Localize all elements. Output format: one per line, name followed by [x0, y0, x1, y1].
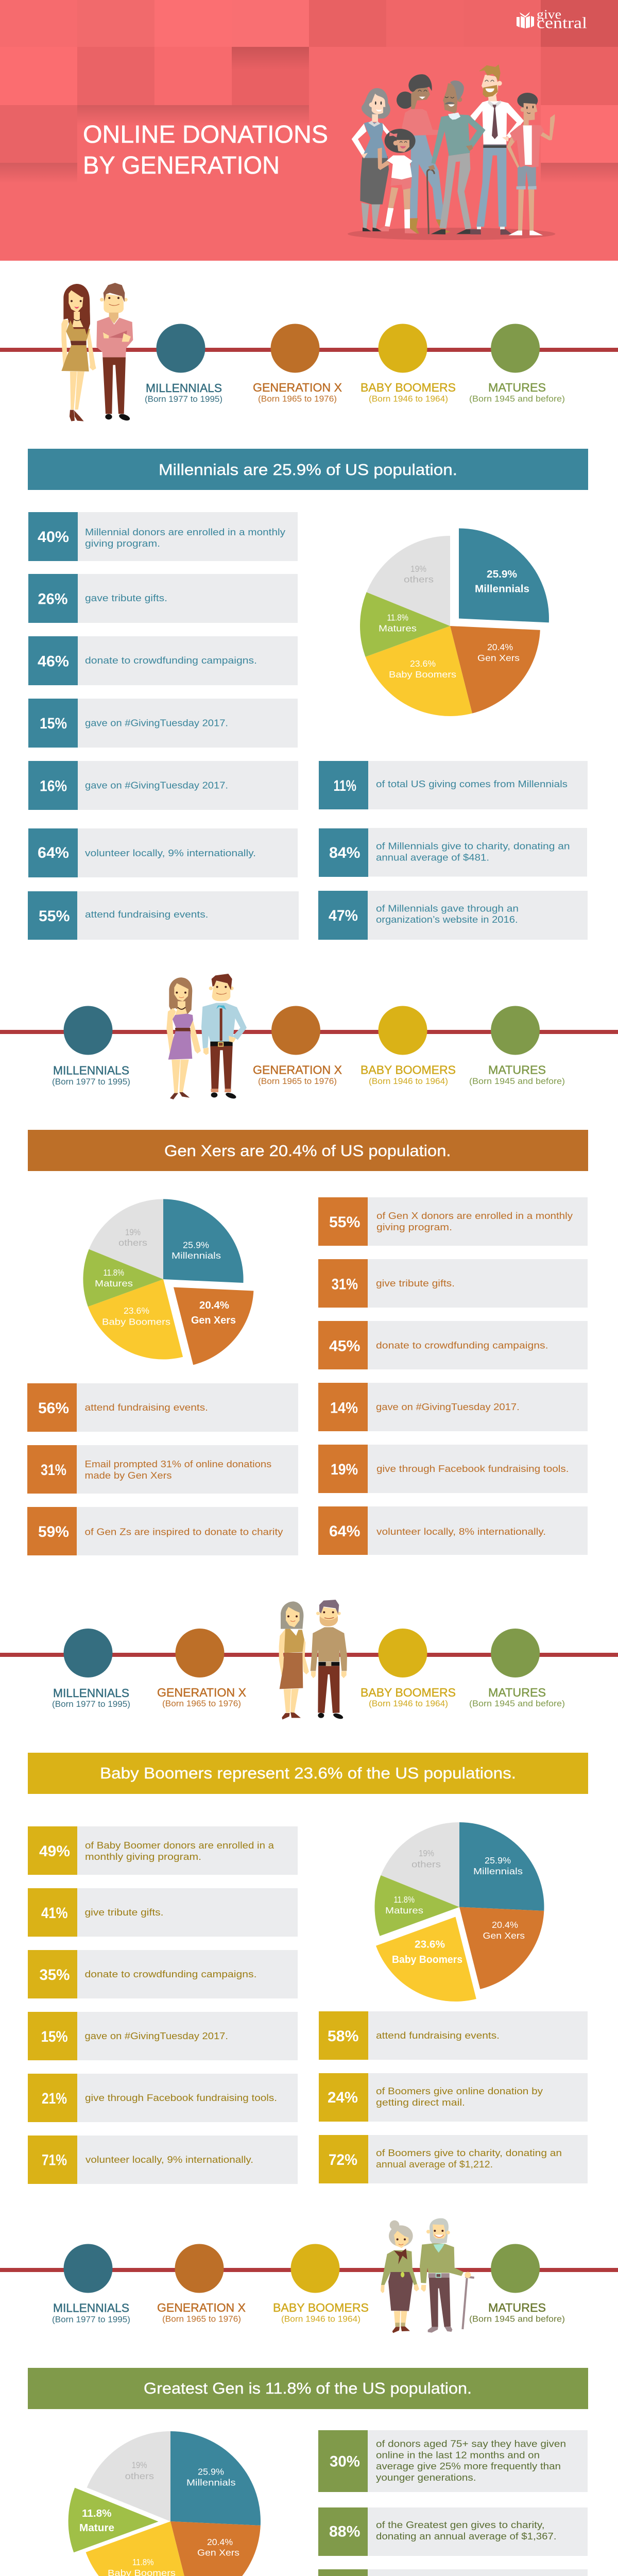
stat: 30% donors aged 75+: 30% — [330, 2453, 360, 2470]
stat: 21% facebook tools — [28, 2074, 298, 2122]
pie chart: baby boomers exploded: Millennials — [473, 1866, 523, 1876]
figure: standing woman behind — [397, 74, 451, 233]
pie chart: matures exploded: Mature — [79, 2522, 114, 2534]
pie chart: millennials exploded: 25.9% — [487, 569, 517, 580]
generation labels: (Born 1977 to 1995) — [145, 395, 222, 404]
stat: 46% crowdfunding: 46% — [38, 653, 69, 670]
stat: 56% fundraising events: attend fundraising events. — [84, 1402, 208, 1413]
stat: 64% volunteer — [28, 828, 298, 877]
stat: 59% gen zs inspired: of Gen Zs are inspired to donate to charity — [84, 1527, 283, 1537]
generation labels: (Born 1945 and before) — [469, 2315, 565, 2324]
stat: 45% crowdfunding — [318, 1321, 588, 1369]
stat: 41% tribute gifts — [28, 1888, 298, 1937]
generation labels — [145, 381, 565, 404]
timeline 2: gen x highlighted — [0, 974, 618, 1100]
stat: 40% monthly giving: Millennial donors are enrolled in a monthly — [85, 527, 285, 537]
generation labels: BABY BOOMERS — [360, 381, 456, 394]
pie chart: matures exploded: 19% — [132, 2460, 147, 2470]
stat: 24% direct mail: 24% — [328, 2089, 358, 2106]
heading banner: gen xers — [28, 1130, 588, 1171]
stat: 30% donors aged 75+: online in the last 12 months and on — [376, 2450, 540, 2461]
title: ONLINE DONATIONS — [83, 121, 328, 148]
pie chart: baby boomers exploded: 25.9% — [485, 1855, 511, 1866]
title — [83, 121, 328, 179]
pie chart: gen xers exploded: Millennials — [171, 1250, 221, 1261]
heading banner: baby boomers — [28, 1753, 588, 1794]
stat: 46% crowdfunding — [28, 636, 298, 685]
generation labels: (Born 1965 to 1976) — [258, 395, 337, 404]
generation labels — [52, 2301, 565, 2325]
stat: 24% direct mail: getting direct mail. — [376, 2097, 465, 2108]
pie chart: matures exploded: 11.8% — [132, 2557, 153, 2567]
stat: 11% of total giving: of total US giving comes from Millennials — [376, 779, 568, 789]
stat: 15% giving tuesday: gave on #GivingTuesday 2017. — [84, 2031, 228, 2041]
timeline 1: millennials highlighted — [0, 283, 618, 422]
generation labels: (Born 1977 to 1995) — [52, 1700, 130, 1709]
stat: 47% website giving: organization’s website in 2016. — [376, 914, 518, 925]
generation labels: GENERATION X — [157, 2301, 246, 2314]
stat: 58% fundraising events: attend fundraising events. — [376, 2030, 500, 2041]
heading banner: greatest gen: Greatest Gen is 11.8% of the US population. — [144, 2379, 472, 2397]
generation labels: (Born 1965 to 1976) — [258, 1077, 337, 1086]
stat: 55% fundraising events: attend fundraising events. — [85, 909, 208, 920]
stat: 16% giving tuesday: gave on #GivingTuesday 2017. — [85, 781, 228, 791]
stat: 72% give to charity: annual average of $1,212. — [376, 2159, 493, 2170]
stat: 64% volunteer: 64% — [329, 1523, 360, 1540]
stat: 64% volunteer: volunteer locally, 9% internationally. — [85, 848, 256, 858]
stat: 55% monthly giving: of Gen X donors are enrolled in a monthly — [376, 1211, 573, 1221]
stat: 30% donors aged 75+: younger generations. — [376, 2472, 476, 2483]
pie chart: gen xers exploded: Gen Xers — [191, 1315, 236, 1326]
generation labels: (Born 1945 and before) — [469, 1699, 565, 1708]
generation labels: (Born 1946 to 1964) — [369, 395, 448, 404]
stat: 56% fundraising events: 56% — [38, 1400, 69, 1417]
pie chart: baby boomers exploded: Gen Xers — [483, 1930, 525, 1941]
logo: give central — [517, 8, 587, 32]
stat: 88% give to charity: donating an annual average of $1,367. — [376, 2531, 557, 2541]
stat: 14% giving tuesday — [318, 1383, 588, 1431]
stat: 88% give to charity: 88% — [329, 2523, 360, 2540]
generation labels: MATURES — [488, 1063, 546, 1077]
stat: 49% monthly giving: 49% — [39, 1843, 70, 1860]
section: gen xers — [27, 1130, 588, 1555]
stat: 15% giving tuesday — [28, 2012, 298, 2060]
stat: 55% monthly giving: giving program. — [376, 1222, 452, 1232]
stat: 21% facebook tools: give through Facebook fundraising tools. — [85, 2093, 277, 2103]
pie chart: baby boomers exploded: 11.8% — [393, 1894, 415, 1905]
pie chart: gen xers exploded: 11.8% — [103, 1267, 124, 1278]
stat: 14% giving tuesday: 14% — [330, 1399, 358, 1416]
heading banner: baby boomers: Baby Boomers represent 23.6% of the US populations. — [100, 1764, 516, 1782]
pie chart: millennials exploded: 23.6% — [410, 658, 436, 669]
stat: 15% giving tuesday: 15% — [40, 715, 67, 732]
pie chart: baby boomers exploded: 23.6% — [415, 1939, 445, 1951]
pie chart: gen xers exploded: 25.9% — [183, 1240, 209, 1250]
generation labels — [52, 1686, 565, 1709]
stat: 30% donors aged 75+ — [318, 2430, 588, 2492]
stat: 47% website giving: of Millennials gave through an — [376, 903, 519, 913]
heading banner: millennials: Millennials are 25.9% of US population. — [159, 461, 457, 479]
stat: 72% give to charity: 72% — [329, 2151, 357, 2168]
generation labels: (Born 1946 to 1964) — [369, 1077, 448, 1086]
stat: 19% facebook tools: give through Facebook fundraising tools. — [376, 1464, 569, 1474]
stat: 40% monthly giving: 40% — [38, 529, 69, 546]
stat: 55% fundraising events — [28, 891, 299, 940]
pie chart: millennials exploded: Baby Boomers — [389, 669, 456, 680]
logo: give central: give — [537, 8, 561, 22]
stat: 31% email prompted — [27, 1445, 298, 1494]
generation labels: (Born 1946 to 1964) — [369, 1699, 448, 1708]
stat: 64% volunteer: 64% — [38, 844, 69, 861]
figure: older man with cane — [427, 80, 486, 234]
timeline 3: baby boomers highlighted — [0, 1600, 618, 1720]
stat: 41% tribute gifts: give tribute gifts. — [84, 1907, 164, 1918]
stat: 47% website giving — [318, 891, 588, 940]
figure: tall bearded man — [470, 64, 524, 235]
stat: 31% email prompted: Email prompted 31% of online donations — [84, 1459, 271, 1469]
pie chart: baby boomers exploded: 20.4% — [492, 1920, 518, 1930]
illustration: millennial couple — [61, 283, 133, 422]
pie chart: gen xers exploded: 20.4% — [199, 1300, 229, 1311]
pie chart: baby boomers exploded: others — [411, 1859, 441, 1869]
pie chart: gen xers exploded: Matures — [95, 1278, 133, 1289]
stat: 35% crowdfunding: donate to crowdfunding campaigns. — [84, 1969, 256, 1979]
stat: 26% total giving — [318, 2569, 588, 2576]
pie chart: baby boomers exploded: Matures — [385, 1905, 423, 1916]
generation labels: (Born 1965 to 1976) — [162, 1699, 241, 1708]
stat: 11% of total giving — [319, 761, 588, 809]
pie chart: baby boomers exploded: Baby Boomers — [392, 1954, 462, 1965]
pie chart: baby boomers exploded: 19% — [419, 1848, 434, 1858]
generation labels — [52, 1063, 565, 1087]
stat: 55% monthly giving: 55% — [329, 1214, 360, 1231]
stat: 72% give to charity — [319, 2135, 588, 2183]
generation labels: (Born 1946 to 1964) — [281, 2315, 360, 2324]
stat: 64% volunteer — [318, 1506, 588, 1555]
stat: 71% volunteer: 71% — [42, 2152, 67, 2169]
figure: grandmother — [352, 88, 390, 231]
pie chart: millennials exploded: 11.8% — [387, 613, 408, 623]
stat: 84% give to charity: of Millennials give to charity, donating an — [376, 841, 570, 851]
section: millennials — [28, 449, 588, 940]
pie chart: matures exploded: 11.8% — [82, 2508, 112, 2519]
stat: 31% email prompted: made by Gen Xers — [84, 1470, 172, 1481]
stat: 58% fundraising events: 58% — [328, 2028, 358, 2045]
stat: 40% monthly giving — [28, 512, 298, 561]
stat: 26% tribute gifts: 26% — [38, 590, 68, 607]
stat: 59% gen zs inspired — [27, 1507, 298, 1555]
stat: 16% giving tuesday — [28, 761, 298, 810]
section: baby boomers — [28, 1753, 588, 2184]
stat: 64% volunteer: volunteer locally, 8% internationally. — [376, 1527, 546, 1537]
pie chart: millennials exploded: 20.4% — [487, 642, 513, 652]
generation labels: GENERATION X — [253, 381, 342, 394]
stat: 19% facebook tools — [318, 1445, 588, 1493]
generation labels: MILLENNIALS — [53, 2301, 129, 2315]
stat: 15% giving tuesday: 15% — [41, 2028, 68, 2045]
stat: 49% monthly giving: monthly giving program. — [85, 1852, 201, 1862]
stat: 31% tribute gifts: give tribute gifts. — [376, 1278, 455, 1289]
stat: 26% tribute gifts: gave tribute gifts. — [85, 593, 167, 603]
stat: 31% tribute gifts — [318, 1259, 588, 1308]
stat: 24% direct mail: of Boomers give online donation by — [376, 2086, 543, 2096]
stat: 46% crowdfunding: donate to crowdfunding campaigns. — [85, 655, 257, 666]
stat: 84% give to charity — [319, 828, 587, 877]
stat: 11% of total giving: 11% — [334, 777, 356, 794]
pie chart: gen xers exploded: others — [118, 1238, 147, 1248]
stat: 35% crowdfunding — [28, 1950, 298, 1998]
stat: 16% giving tuesday: 16% — [40, 778, 67, 795]
pie chart: baby boomers exploded — [374, 1822, 544, 2002]
pie chart: matures exploded: 25.9% — [198, 2467, 224, 2477]
stat: 55% monthly giving — [318, 1197, 588, 1246]
pie chart: matures exploded — [68, 2431, 261, 2576]
stat: 71% volunteer — [28, 2136, 298, 2184]
generation labels: (Born 1945 and before) — [469, 1077, 565, 1086]
generation labels: MATURES — [488, 381, 546, 394]
generation labels: MILLENNIALS — [53, 1686, 129, 1700]
stat: 49% monthly giving: of Baby Boomer donors are enrolled in a — [85, 1840, 274, 1851]
stat: 84% give to charity: 84% — [329, 844, 360, 861]
pie chart: gen xers exploded: Baby Boomers — [102, 1316, 170, 1327]
hero banner — [0, 0, 618, 261]
section: greatest gen — [28, 2368, 588, 2576]
generation labels: MILLENNIALS — [146, 381, 222, 395]
figure: young girl — [377, 129, 417, 233]
generation labels: (Born 1977 to 1995) — [52, 1077, 130, 1087]
stat: 15% giving tuesday — [28, 699, 298, 748]
pie chart: matures exploded: others — [125, 2471, 154, 2481]
stat: 31% email prompted: 31% — [41, 1462, 66, 1479]
figure: boy waving — [507, 93, 555, 235]
stat: 14% giving tuesday: gave on #GivingTuesday 2017. — [376, 1402, 520, 1412]
stat: 58% fundraising events — [319, 2011, 588, 2060]
stat: 88% give to charity: of the Greatest gen gives to charity, — [376, 2520, 545, 2530]
timeline 4: matures highlighted — [0, 2218, 618, 2333]
heading banner: millennials — [28, 449, 588, 490]
heading banner: greatest gen — [28, 2368, 588, 2409]
generation labels: GENERATION X — [157, 1686, 246, 1699]
generation labels: MATURES — [488, 1686, 546, 1699]
stat: 88% give to charity — [318, 2507, 588, 2556]
stat: 49% monthly giving — [28, 1826, 298, 1875]
stat: 30% donors aged 75+: average give 25% more frequently than — [376, 2461, 561, 2471]
stat: 31% tribute gifts: 31% — [332, 1276, 358, 1293]
stat: 72% give to charity: of Boomers give to charity, donating an — [376, 2148, 562, 2158]
stat: 55% fundraising events: 55% — [39, 908, 70, 925]
stat: 21% facebook tools: 21% — [42, 2090, 67, 2107]
pie chart: millennials exploded — [360, 529, 549, 716]
illustration: baby boomer couple — [279, 1600, 347, 1720]
pie chart: matures exploded: Gen Xers — [197, 2548, 239, 2558]
generation labels: BABY BOOMERS — [273, 2301, 369, 2314]
stat: 30% donors aged 75+: of donors aged 75+ say they have given — [376, 2439, 566, 2449]
pie chart: matures exploded: 20.4% — [207, 2537, 233, 2547]
illustration: elderly couple — [381, 2218, 474, 2333]
generation labels: (Born 1965 to 1976) — [162, 2315, 241, 2324]
logo: give central: central — [537, 13, 587, 32]
stat: 71% volunteer: volunteer locally, 9% internationally. — [85, 2155, 253, 2165]
generation labels: GENERATION X — [253, 1063, 342, 1077]
illustration: gen x couple — [166, 974, 247, 1100]
pie chart: millennials exploded: 19% — [410, 564, 426, 574]
stat: 26% tribute gifts — [28, 574, 298, 623]
generation labels: MILLENNIALS — [53, 1064, 129, 1077]
generation labels: BABY BOOMERS — [360, 1063, 456, 1077]
stat: 19% facebook tools: 19% — [331, 1461, 358, 1478]
pie chart: millennials exploded: Gen Xers — [477, 653, 520, 663]
pie chart: matures exploded: Millennials — [186, 2478, 236, 2488]
stat: 59% gen zs inspired: 59% — [38, 1523, 69, 1540]
stat: 47% website giving: 47% — [329, 907, 358, 924]
stat: 35% crowdfunding: 35% — [39, 1967, 70, 1984]
generation labels: MATURES — [488, 2301, 546, 2314]
heading banner: gen xers: Gen Xers are 20.4% of US population. — [164, 1142, 451, 1160]
title: BY GENERATION — [83, 152, 280, 179]
generation labels: (Born 1945 and before) — [469, 395, 565, 404]
pie chart: gen xers exploded: 19% — [125, 1227, 141, 1238]
stat: 84% give to charity: annual average of $481. — [376, 852, 489, 862]
stat: 45% crowdfunding: 45% — [329, 1337, 360, 1354]
illustration: family group — [348, 64, 555, 240]
stat: 40% monthly giving: giving program. — [85, 538, 160, 549]
stat: 24% direct mail — [319, 2073, 588, 2122]
generation labels: (Born 1977 to 1995) — [52, 2315, 130, 2325]
stat: 45% crowdfunding: donate to crowdfunding campaigns. — [376, 1340, 548, 1350]
pie chart: millennials exploded: Matures — [379, 623, 417, 634]
pie chart: gen xers exploded — [83, 1199, 253, 1365]
generation labels: BABY BOOMERS — [360, 1686, 456, 1699]
stat: 41% tribute gifts: 41% — [41, 1905, 68, 1922]
stat: 56% fundraising events — [27, 1383, 298, 1432]
pie chart: millennials exploded: others — [404, 574, 434, 585]
pie chart: millennials exploded: Millennials — [475, 583, 529, 595]
pie chart: gen xers exploded: 23.6% — [124, 1306, 149, 1316]
stat: 15% giving tuesday: gave on #GivingTuesday 2017. — [85, 718, 228, 728]
